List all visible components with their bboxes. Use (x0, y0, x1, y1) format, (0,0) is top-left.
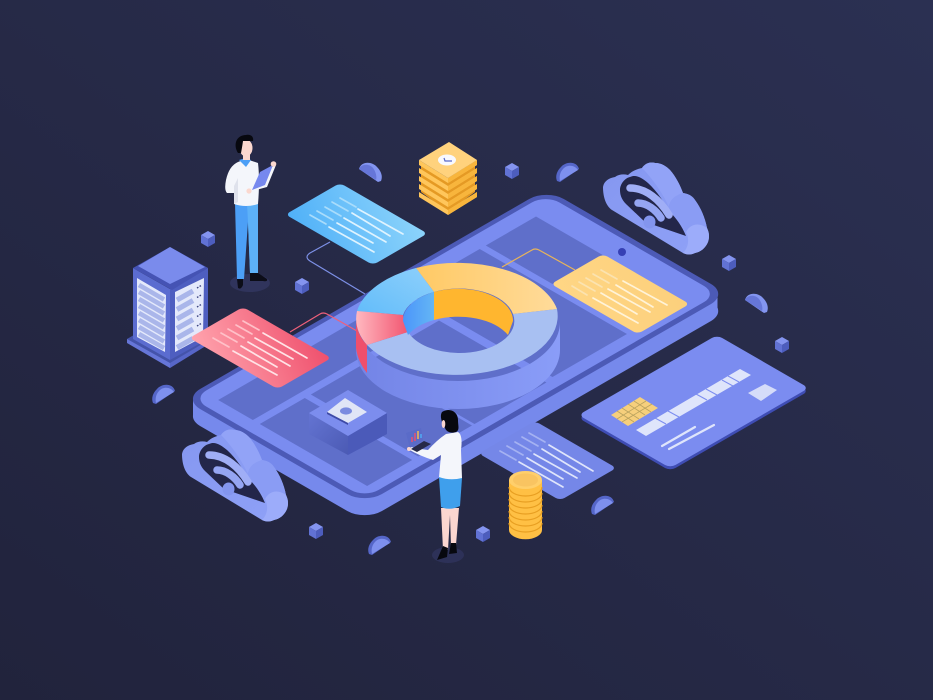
bottom left cloud wifi icon (182, 430, 288, 522)
layered gold stack (419, 142, 477, 215)
donut segment: red (356, 311, 408, 345)
small floating cubes (201, 163, 789, 542)
donut outer wall (356, 322, 560, 409)
plate 1 (419, 160, 477, 183)
donut inner wall: blue (403, 292, 434, 335)
connector: yellow (502, 249, 575, 270)
credit card (578, 335, 809, 471)
box on phone (309, 390, 387, 455)
shoes (237, 273, 267, 289)
connector: blue (307, 242, 365, 294)
cloud wifi icon top right (603, 163, 709, 254)
legs (441, 508, 459, 550)
card number stripe (636, 369, 751, 436)
shirt (225, 159, 259, 206)
heels (437, 543, 457, 560)
hair and face (441, 410, 458, 433)
donut red wall (356, 320, 367, 373)
laptop (406, 428, 431, 452)
chip (611, 397, 658, 426)
donut chart (356, 263, 560, 409)
blue card (285, 183, 427, 265)
donut inner wall: orange (434, 289, 513, 335)
donut segment: light blue (357, 268, 434, 315)
woman with laptop (406, 410, 464, 563)
pink card (189, 307, 331, 389)
server rack (127, 247, 209, 368)
man with clipboard (225, 135, 276, 292)
phone (183, 189, 728, 521)
blouse (408, 432, 462, 479)
lavender document card (479, 421, 616, 500)
clipboard (256, 165, 276, 190)
half moon decorations (152, 163, 768, 555)
head (240, 140, 252, 156)
skirt (439, 477, 462, 509)
trousers (235, 203, 258, 279)
connector: pink (290, 313, 357, 332)
plate 4 (419, 184, 477, 207)
gold coin stack (509, 471, 542, 539)
plate 3 (419, 176, 477, 199)
yellow card (551, 254, 690, 334)
plate 2 (419, 168, 477, 191)
plate 5 (419, 192, 477, 215)
donut segment: periwinkle (367, 309, 558, 375)
donut segment: yellow (416, 263, 557, 314)
